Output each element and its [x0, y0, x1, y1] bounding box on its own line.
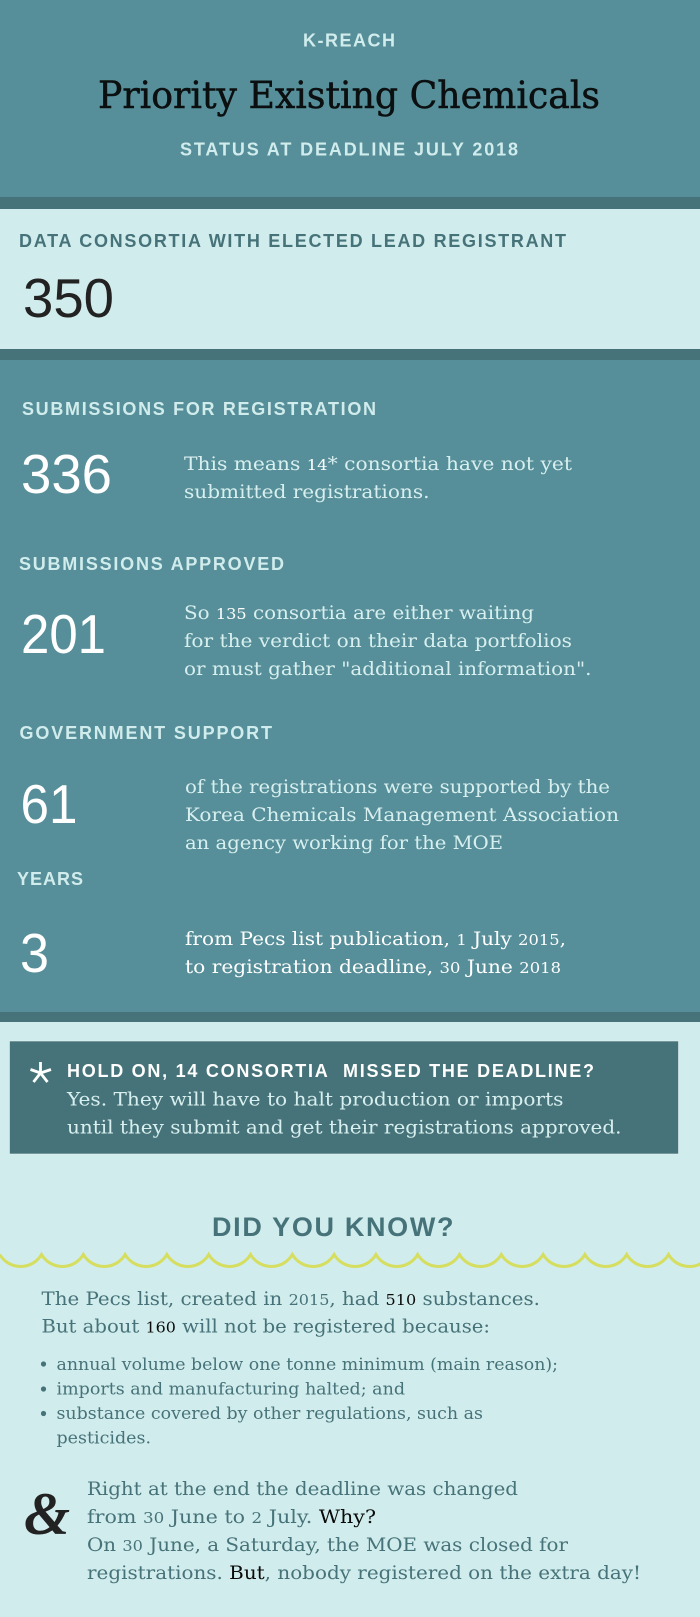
panel: data consortia	[0, 209, 700, 360]
text: Pecs list intro: But about 160 will not be registered because:	[42, 1316, 490, 1338]
text: deadline change: registrations. But, nobody registered on the extra day!	[87, 1563, 641, 1584]
text: 14 consortia not yet submitted	[184, 454, 573, 503]
callout heading: HOLD ON, 14 CONSORTIA MISSED THE DEADLINE?	[67, 1061, 594, 1081]
text: 135 consortia waiting: So 135 consortia are either waiting	[184, 603, 534, 624]
heading: submissions for registration: SUBMISSIONS FOR REGISTRATION	[22, 399, 376, 419]
heading: submissions approved: SUBMISSIONS APPROVED	[19, 554, 284, 574]
number: 3: 3	[20, 922, 49, 984]
icon: asterisk	[30, 1062, 51, 1082]
title: Priority Existing Chemicals	[98, 74, 600, 117]
text: 135 consortia waiting: or must gather "additional information".	[184, 659, 592, 680]
text: publication to deadline: from Pecs list publication, 1 July 2015,	[185, 929, 566, 950]
text: 14 consortia not yet submitted: submitted registrations.	[184, 482, 430, 503]
text: deadline change: from 30 June to 2 July. Why?	[87, 1507, 376, 1528]
text: KCMA support: Korea Chemicals Management Association	[185, 805, 619, 826]
heading: government support: GOVERNMENT SUPPORT	[20, 723, 272, 743]
text: deadline change	[87, 1479, 641, 1584]
bullet list: reasons: annual volume below one tonne minimum (main reason);	[56, 1355, 558, 1375]
bullet list: reasons	[41, 1355, 558, 1448]
text: deadline change: On 30 June, a Saturday, the MOE was closed for	[87, 1535, 568, 1556]
heading: did you know: DID YOU KNOW?	[212, 1212, 454, 1242]
text: publication to deadline: to registration deadline, 30 June 2018	[185, 957, 561, 978]
callout text: until they submit and get their registrations approved.	[67, 1118, 622, 1138]
text: KCMA support	[185, 777, 619, 854]
text: KCMA support: an agency working for the MOE	[185, 833, 503, 854]
callout text	[66, 1090, 621, 1138]
text: deadline change: Right at the end the deadline was changed	[87, 1479, 518, 1500]
icon: ampersand: &	[24, 1481, 70, 1547]
number: 201: 201	[21, 603, 106, 665]
text: 135 consortia waiting	[184, 603, 592, 680]
bullet list: reasons: imports and manufacturing halted; and	[56, 1380, 405, 1400]
text: Pecs list intro	[42, 1289, 540, 1338]
number: 61: 61	[20, 773, 78, 835]
scalloped divider	[0, 1254, 700, 1267]
number: 336: 336	[21, 443, 112, 505]
eyebrow: K-REACH: K-REACH	[303, 30, 395, 50]
panel: header	[0, 0, 700, 209]
text: Pecs list intro: The Pecs list, created in 2015, had 510 substances.	[42, 1289, 540, 1310]
text: 135 consortia waiting: for the verdict on their data portfolios	[184, 631, 572, 652]
text: KCMA support: of the registrations were supported by the	[185, 777, 610, 798]
heading: years: YEARS	[17, 869, 83, 889]
subtitle: STATUS AT DEADLINE JULY 2018	[180, 140, 518, 160]
callout: missed the deadline	[10, 1041, 678, 1154]
heading: data consortia: DATA CONSORTIA WITH ELECTED LEAD REGISTRANT	[19, 231, 566, 251]
bullet list: reasons: pesticides.	[56, 1428, 151, 1448]
text: 14 consortia not yet submitted: This means 14* consortia have not yet	[184, 454, 573, 475]
panel: registration stats	[0, 360, 700, 1022]
text: publication to deadline	[185, 929, 566, 978]
bullet list: reasons: substance covered by other regulations, such as	[56, 1404, 483, 1424]
callout text: Yes. They will have to halt production or imports	[66, 1090, 564, 1110]
number: 350: 350	[23, 267, 114, 329]
